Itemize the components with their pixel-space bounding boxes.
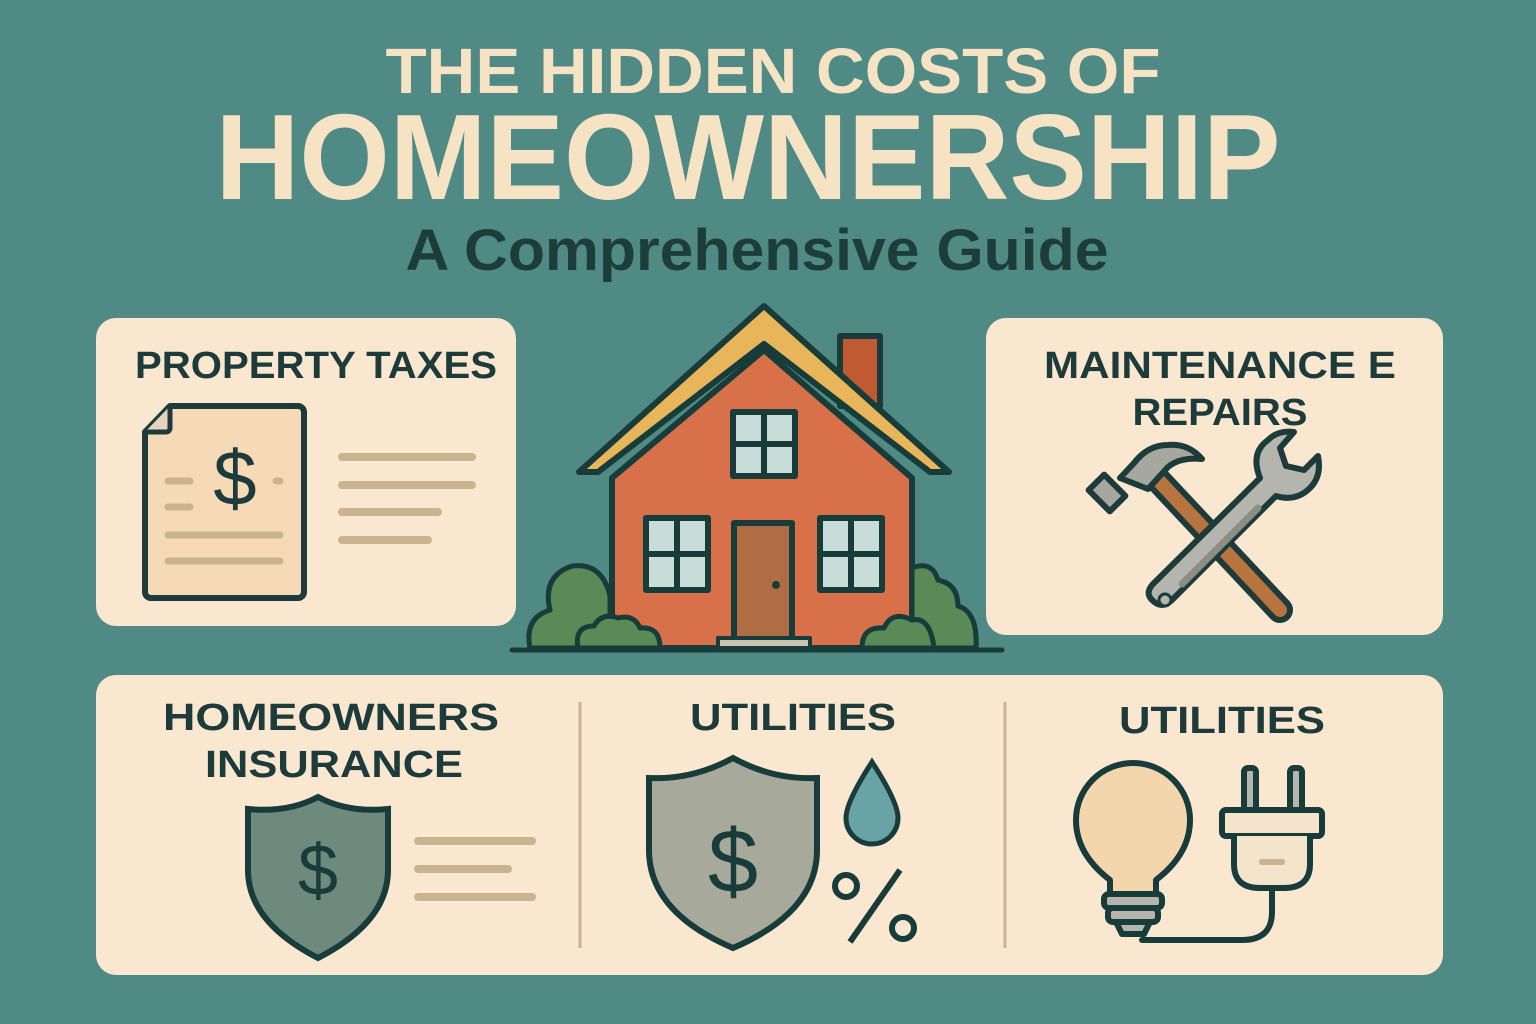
title bbox=[216, 35, 1280, 225]
icon: tax document: $ bbox=[213, 434, 257, 522]
icon: shield large: $ bbox=[708, 812, 758, 912]
heading: property taxes: PROPERTY TAXES bbox=[135, 345, 497, 387]
heading: homeowners insurance: INSURANCE bbox=[205, 744, 463, 786]
subtitle: A Comprehensive Guide bbox=[406, 218, 1108, 283]
panel: property taxes bbox=[96, 318, 516, 626]
heading: utilities 2: UTILITIES bbox=[1119, 700, 1325, 742]
heading: utilities: UTILITIES bbox=[690, 697, 896, 739]
icon: shield small bbox=[248, 797, 388, 958]
heading: maintenance bbox=[1044, 345, 1396, 434]
icon: light bulb bbox=[1076, 763, 1190, 934]
icon: water drop bbox=[846, 762, 898, 844]
icon: hammer and wrench bbox=[1089, 432, 1319, 610]
heading: maintenance: REPAIRS bbox=[1132, 392, 1308, 434]
heading: maintenance: MAINTENANCE E bbox=[1044, 345, 1396, 387]
title: HOMEOWNERSHIP bbox=[216, 89, 1280, 225]
icon: plug bbox=[1142, 768, 1322, 940]
icon: tax document bbox=[145, 406, 304, 598]
icon: shield large bbox=[649, 758, 817, 948]
text lines bbox=[342, 457, 472, 540]
title: THE HIDDEN COSTS OF bbox=[386, 35, 1160, 107]
panel: maintenance bbox=[986, 318, 1443, 635]
heading: homeowners insurance: HOMEOWNERS bbox=[163, 697, 499, 739]
panel: bottom bbox=[96, 675, 1443, 975]
house illustration bbox=[512, 306, 1002, 650]
icon: shield small: $ bbox=[298, 831, 338, 911]
windows bbox=[646, 412, 882, 590]
bushes bbox=[529, 566, 610, 648]
icon: percent bbox=[835, 870, 914, 942]
heading: homeowners insurance bbox=[163, 697, 499, 786]
